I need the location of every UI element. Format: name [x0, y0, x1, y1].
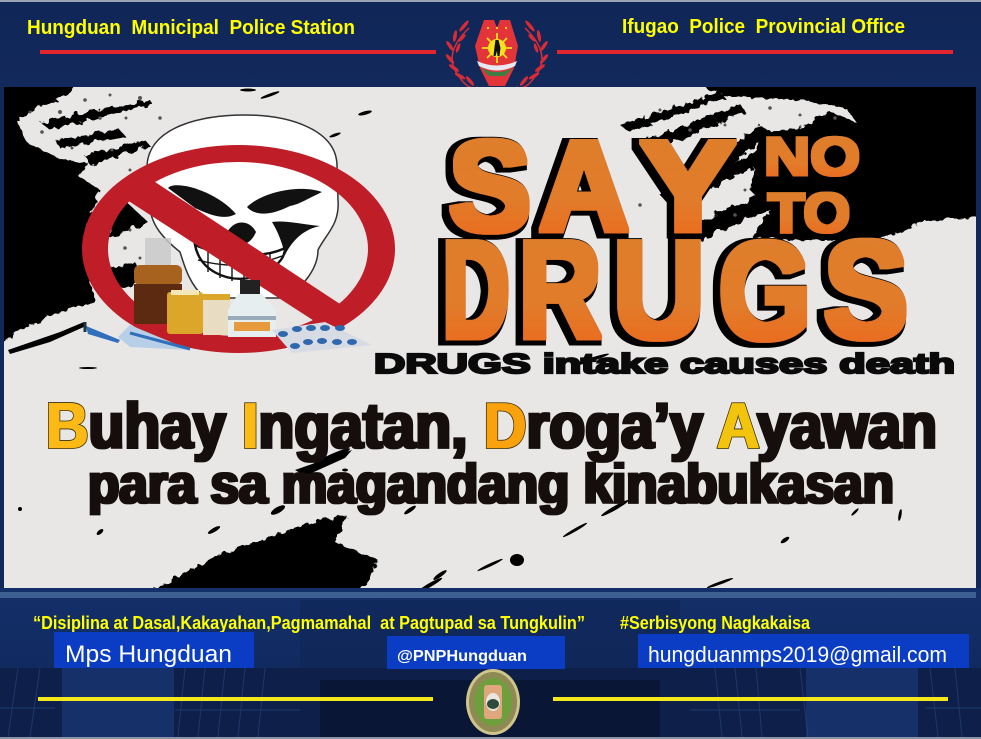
title part: DRUGS — [438, 238, 907, 348]
icon: medicine bottles — [134, 238, 276, 337]
title part: SAY: A — [539, 113, 629, 259]
title part: DRUGS: D — [443, 211, 509, 368]
banner panel: Say No To Drugs — [0, 80, 981, 594]
slogan: Buhay Ingatan, Droga'y Ayawan: Buhay Ingatan, Droga’y Ayawan — [46, 389, 937, 462]
twitter label box — [387, 636, 565, 669]
title part: SAY: S — [449, 113, 531, 259]
twitter label box: @PNPHungduan — [397, 648, 527, 665]
title: SAY NO TO DRUGS — [438, 136, 907, 348]
black ink splatter — [0, 80, 981, 594]
icon: pill blister pack — [272, 322, 372, 353]
facebook label box: Mps Hungduan — [65, 641, 232, 668]
title part: DRUGS: R — [519, 211, 601, 368]
facebook label box — [54, 632, 254, 668]
hashtag: #Serbisyong Nagkakaisa — [620, 613, 811, 633]
yellow rule left — [38, 697, 433, 701]
icon: skull — [147, 115, 338, 298]
email label box: hungduanmps2019@gmail.com — [648, 642, 947, 667]
motto: “Disiplina at Dasal,Kakayahan,Pagmamahal at Pagtupad sa Tungkulin” — [33, 613, 585, 633]
subtitle: DRUGS intake causes death: DRUGS intake causes death — [374, 348, 955, 379]
icon: syringe — [85, 322, 190, 350]
footer band — [0, 588, 981, 739]
title part: DRUGS: U — [613, 211, 705, 368]
title part: SAY — [442, 136, 738, 240]
title part: NO TO: NO — [764, 127, 860, 187]
heading: Ifugao Police Provincial Office: Ifugao Police Provincial Office — [622, 16, 905, 38]
heading: Hungduan Municipal Police Station: Hungduan Municipal Police Station — [27, 17, 355, 39]
yellow rule right — [553, 697, 948, 701]
title part: SAY: Y — [640, 113, 736, 259]
slogan: para sa magandang kinabukasan: para sa magandang kinabukasan — [88, 452, 894, 515]
icon: PNP logo with laurels — [445, 19, 549, 88]
title part: DRUGS: G — [719, 212, 811, 369]
email label box — [638, 634, 969, 668]
icon: prohibition sign — [82, 145, 395, 353]
red rule right — [557, 50, 953, 54]
title part: NO TO: TO — [768, 181, 850, 244]
icon: municipal seal — [466, 669, 520, 735]
title part: NO TO — [766, 136, 860, 234]
title part: DRUGS: S — [824, 211, 908, 368]
red rule left — [40, 50, 436, 54]
header band — [0, 0, 981, 88]
